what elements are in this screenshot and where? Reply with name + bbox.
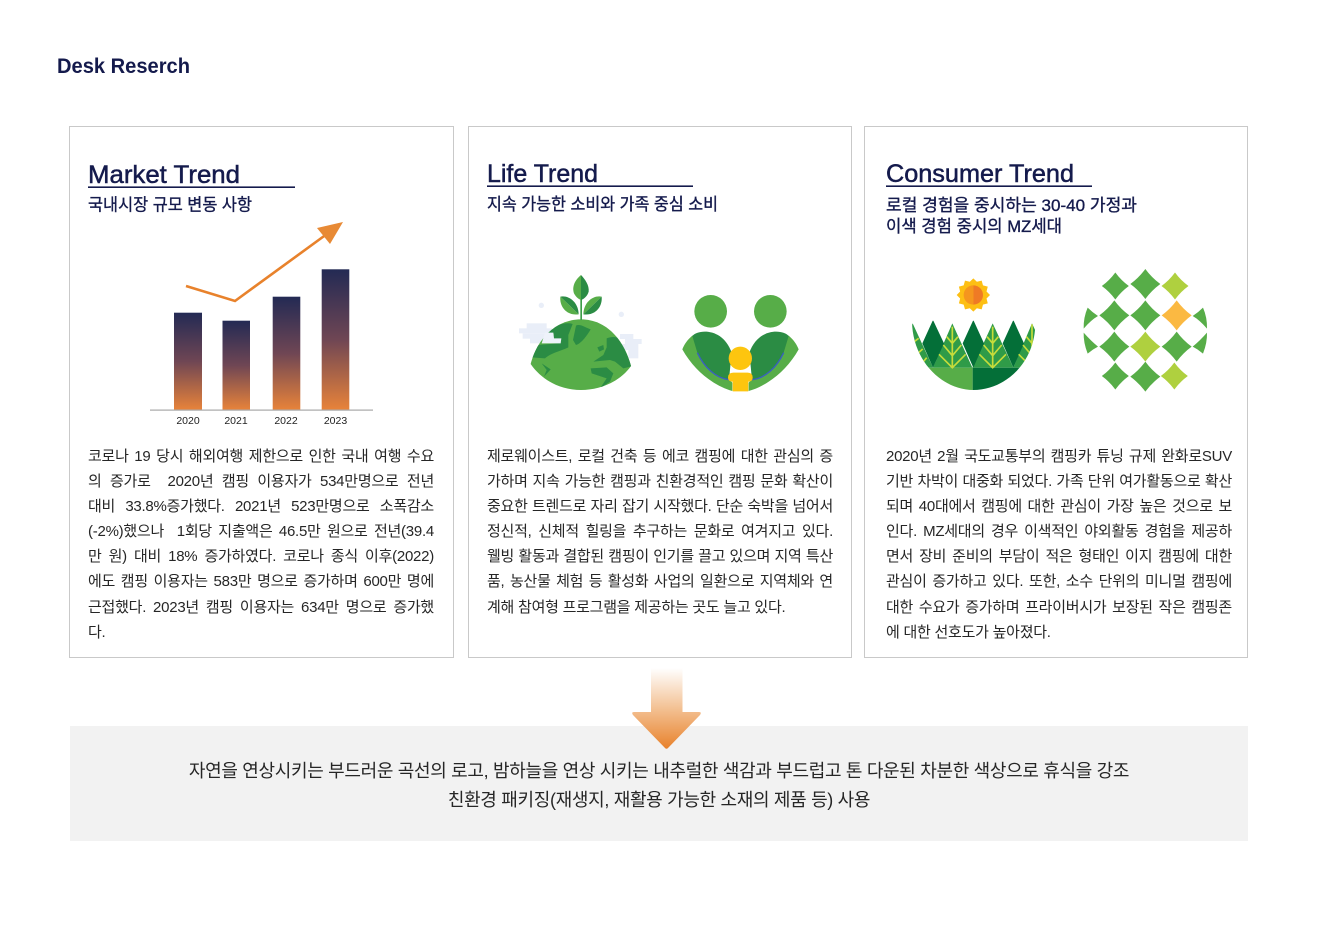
body text: life trend — [487, 448, 833, 616]
heading: consumer trend: 이색 경험 중시의 MZ세대 — [886, 217, 1062, 236]
body text: consumer trend: 기반 차박이 대중화 되었다. 가족 단위 여가활동으로 확산 — [886, 473, 1232, 490]
heading: life trend: Life Trend — [487, 160, 598, 188]
body text: life trend: 정신적, 신체적 힐링을 추구하는 문화로 여겨지고 있다. — [487, 523, 833, 540]
bar chart with trend arrow: 2020 — [176, 415, 200, 427]
heading: market trend: Market Trend — [88, 161, 240, 189]
heading: market trend — [88, 161, 295, 214]
heading: consumer trend: 로컬 경험을 중시하는 30-40 가정과 — [886, 196, 1137, 215]
body text: consumer trend: 2020년 2월 국도교통부의 캠핑카 튜닝 규제 완화로SUV — [886, 448, 1232, 465]
body text: consumer trend: 인다. MZ세대의 경우 이색적인 야외활동 경험을 제공하 — [886, 523, 1232, 540]
body text: consumer trend: 면서 장비 준비의 부담이 적은 형태인 이지 캠핑에 대한 — [886, 548, 1232, 565]
conclusion text: 친환경 패키징(재생지, 재활용 가능한 소재의 제품 등) 사용 — [448, 790, 870, 810]
bar chart with trend arrow: 2023 — [324, 415, 347, 427]
page title: Desk Reserch — [57, 55, 190, 78]
body text: market trend: (-2%)했으나 1회당 지출액은 46.5만 원으로 전년(39.4 — [88, 523, 434, 540]
body text: market trend: 대비 33.8%증가했다. 2021년 523만명으로 소폭감소 — [88, 498, 434, 515]
body text: market trend: 코로나 19 당시 해외여행 제한으로 인한 국내 여행 수요 — [88, 448, 434, 465]
body text: life trend: 가하며 지속 가능한 캠핑과 친환경적인 캠핑 문화 확산이 — [487, 473, 833, 490]
body text: life trend: 제로웨이스트, 로컬 건축 등 에코 캠핑에 대한 관심의 증 — [487, 448, 833, 465]
body text: market trend: 근접했다. 2023년 캠핑 이용자는 634만 명으로 증가했 — [88, 599, 434, 616]
body text: market trend: 의 증가로 2020년 캠핑 이용자가 534만명으로 전년 — [88, 473, 434, 490]
icon: diamond pattern circle — [1084, 269, 1207, 392]
conclusion text — [189, 761, 1129, 810]
body text: consumer trend: 되며 40대에서 캠핑에 대한 관심이 가장 높은 것으로 보 — [886, 498, 1232, 515]
arrow: down — [632, 671, 701, 749]
icon: sun over forest — [912, 278, 1035, 390]
body text: life trend: 품, 농산물 체험 등 활성화 사업의 일환으로 지역체와 연 — [487, 573, 833, 590]
body text: market trend: 다. — [88, 624, 105, 641]
heading: market trend: 국내시장 규모 변동 사항 — [88, 196, 252, 214]
bar chart with trend arrow: 2022 — [274, 415, 298, 427]
heading: consumer trend — [886, 160, 1137, 236]
bar chart with trend arrow: 2021 — [224, 415, 248, 427]
body text: consumer trend — [886, 448, 1232, 641]
heading: life trend — [487, 160, 718, 214]
body text: market trend — [88, 448, 434, 641]
body text: life trend: 웰빙 활동과 결합된 캠핑이 인기를 끌고 있으며 지역 특산 — [487, 548, 833, 565]
panel: consumer trend — [864, 126, 1248, 658]
conclusion text: 자연을 연상시키는 부드러운 곡선의 로고, 밤하늘을 연상 시키는 내추럴한 색감과 부드럽고 톤 다운된 차분한 색상으로 휴식을 강조 — [189, 761, 1129, 781]
icon: family — [682, 295, 799, 392]
heading: life trend: 지속 가능한 소비와 가족 중심 소비 — [487, 195, 718, 214]
icon: earth with sprout — [519, 275, 642, 390]
panel: market trend — [69, 126, 454, 658]
body text: life trend: 중요한 트렌드로 자리 잡기 시작했다. 단순 숙박을 넘어서 — [487, 498, 833, 515]
bar chart with trend arrow — [150, 222, 373, 427]
conclusion box — [70, 726, 1248, 841]
body text: life trend: 계해 참여형 프로그램을 제공하는 곳도 늘고 있다. — [487, 599, 785, 616]
panel: life trend — [468, 126, 852, 658]
body text: consumer trend: 관심이 증가하고 있다. 또한, 소수 단위의 미니멀 캠핑에 — [886, 573, 1232, 590]
body text: consumer trend: 에 대한 선호도가 높아졌다. — [886, 624, 1051, 641]
body text: market trend: 만 원) 대비 18% 증가하였다. 코로나 종식 이후(2022) — [88, 548, 434, 565]
body text: consumer trend: 대한 수요가 증가하며 프라이버시가 보장된 작은 캠핑존 — [886, 599, 1232, 616]
heading: consumer trend: Consumer Trend — [886, 160, 1074, 188]
body text: market trend: 에도 캠핑 이용자는 583만 명으로 증가하며 600만 명에 — [88, 573, 434, 590]
